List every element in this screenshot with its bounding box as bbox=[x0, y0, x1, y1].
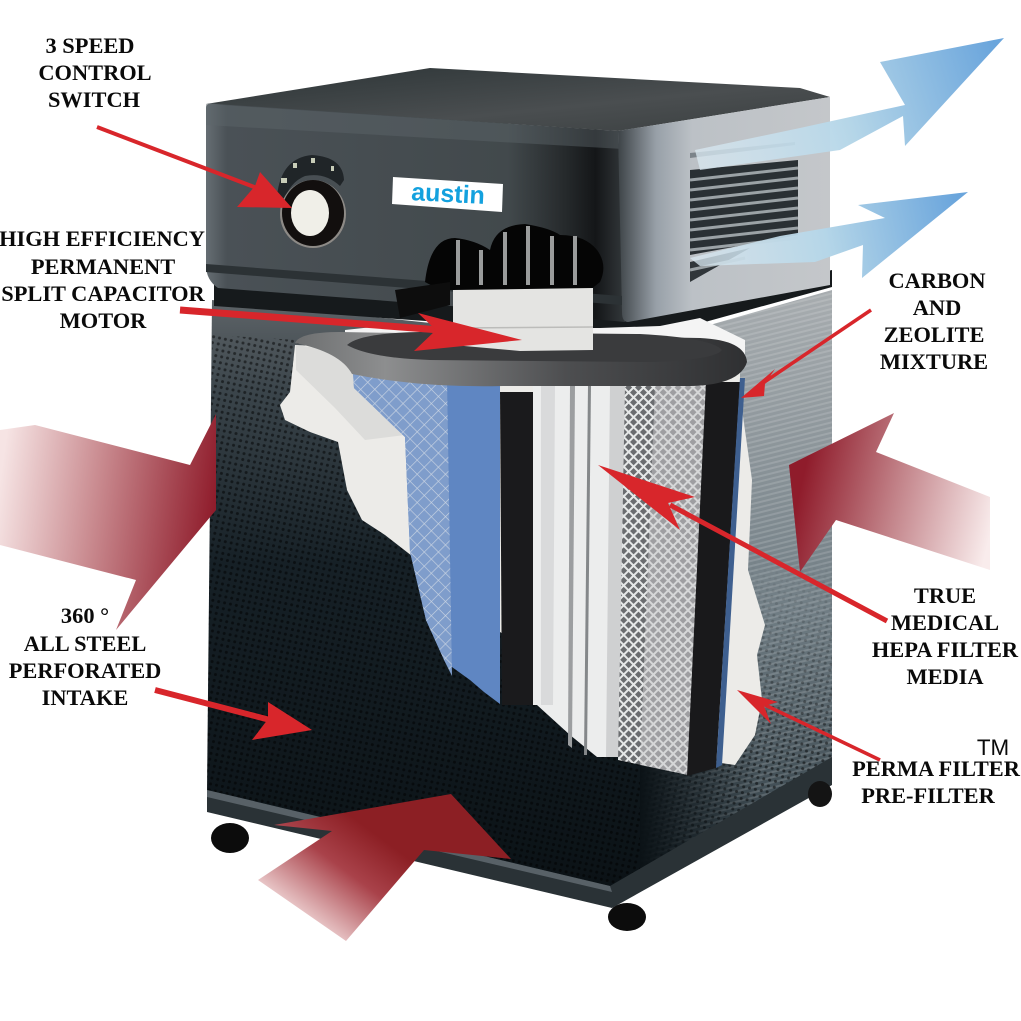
torn white edge above filter bbox=[345, 318, 745, 360]
air purifier lower perforated body bbox=[207, 290, 832, 888]
blue exhaust arrow lower bbox=[690, 192, 968, 278]
label: pre-filter: PERMA FILTER bbox=[852, 756, 1021, 781]
blue outer media bbox=[353, 372, 500, 704]
label: speed control: SWITCH bbox=[48, 87, 141, 112]
dark gap under housing bbox=[214, 270, 832, 340]
label: HEPA: HEPA FILTER bbox=[872, 637, 1019, 662]
air purifier top housing bbox=[206, 68, 830, 322]
label: HEPA: TRUE bbox=[914, 583, 976, 608]
red intake arrow right bbox=[789, 413, 990, 572]
filter cap bbox=[295, 332, 747, 386]
label: HEPA bbox=[872, 583, 1019, 689]
label: pre-filter: PRE-FILTER bbox=[861, 783, 996, 808]
red intake arrow bottom bbox=[258, 794, 511, 941]
front face bbox=[206, 104, 625, 322]
label: HEPA: MEDIA bbox=[906, 664, 984, 689]
blue exhaust arrow upper bbox=[695, 38, 1004, 170]
label: speed control: CONTROL bbox=[38, 60, 152, 85]
label: carbon and zeolite: CARBON bbox=[888, 268, 986, 293]
austin logo: austin bbox=[411, 178, 486, 210]
label: carbon and zeolite: ZEOLITE bbox=[884, 322, 984, 347]
right face bbox=[618, 97, 830, 322]
black carbon layer right bbox=[687, 382, 740, 776]
pointer: intake bbox=[155, 690, 312, 740]
label: intake: ALL STEEL bbox=[24, 631, 146, 656]
red intake arrow left bbox=[0, 414, 216, 630]
austin logo bbox=[392, 177, 503, 212]
motor fan bbox=[395, 224, 603, 318]
pointer: carbon bbox=[741, 310, 871, 398]
motor collar bbox=[453, 288, 593, 351]
base band bbox=[207, 757, 832, 908]
blue mesh layer bbox=[353, 372, 452, 676]
label: intake: INTAKE bbox=[42, 685, 128, 710]
label: motor: HIGH EFFICIENCY bbox=[0, 226, 205, 251]
label: motor bbox=[0, 226, 206, 333]
label: HEPA: MEDICAL bbox=[891, 610, 999, 635]
thin blue edge bbox=[716, 378, 745, 768]
pointer: motor bbox=[180, 310, 522, 351]
label: pre-filter bbox=[852, 735, 1021, 808]
label: speed control bbox=[38, 33, 152, 112]
label: motor: SPLIT CAPACITOR bbox=[1, 281, 206, 306]
label: carbon and zeolite bbox=[880, 268, 988, 374]
label: intake bbox=[9, 603, 161, 710]
pointer: speed control bbox=[97, 127, 292, 208]
label: motor: MOTOR bbox=[60, 308, 147, 333]
vent grille bbox=[690, 142, 798, 282]
label: carbon and zeolite: MIXTURE bbox=[880, 349, 988, 374]
label: carbon and zeolite: AND bbox=[913, 295, 961, 320]
top face bbox=[206, 68, 830, 131]
white pleats bbox=[533, 385, 625, 757]
black carbon layer left bbox=[500, 392, 533, 705]
pointer: pre-filter bbox=[737, 690, 880, 760]
cutaway filter assembly bbox=[280, 332, 765, 776]
feet bbox=[211, 781, 832, 931]
label: intake: 360 ° bbox=[61, 603, 109, 628]
label: speed control: 3 SPEED bbox=[46, 33, 134, 58]
pointer: HEPA bbox=[598, 465, 887, 621]
speed control dial bbox=[277, 155, 346, 248]
label: motor: PERMANENT bbox=[31, 254, 175, 279]
label: pre-filter: TM bbox=[977, 735, 1009, 760]
foam flap bbox=[296, 345, 405, 440]
perforated metal mesh bbox=[618, 385, 707, 775]
outer white foam pre-filter bbox=[280, 345, 765, 765]
label: intake: PERFORATED bbox=[9, 658, 161, 683]
